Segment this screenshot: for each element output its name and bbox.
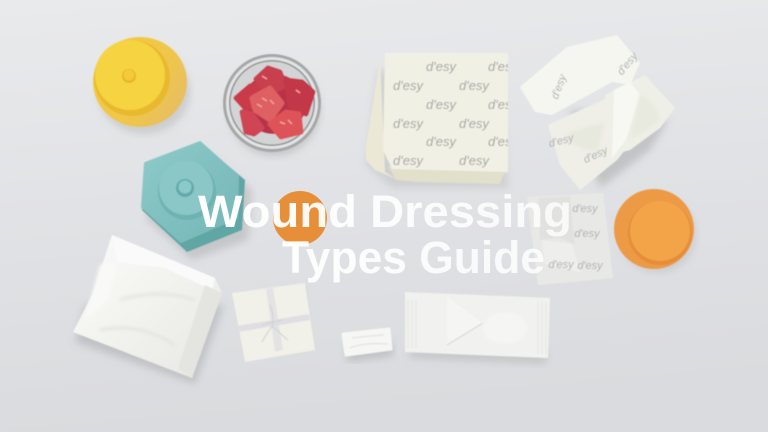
repeated brand print: d'esy <box>459 153 490 168</box>
panel: small folded gauze: d'esy <box>577 260 604 272</box>
icon: orange cap <box>614 189 696 273</box>
repeated brand print: d'esy <box>393 153 424 168</box>
repeated brand print: d'esy <box>426 97 457 112</box>
panel: tied gauze square <box>232 283 315 362</box>
panel: small folded gauze: d'esy <box>548 259 575 271</box>
panel: small folded gauze: d'esy <box>572 203 599 215</box>
repeated brand print: d'esy <box>393 78 424 93</box>
panel: crumpled printed cloth: d'esy <box>547 132 576 150</box>
icon: yellow pot <box>93 37 190 134</box>
panel: crumpled printed cloth: d'esy <box>615 49 641 78</box>
title: Wound Dressing <box>198 186 572 237</box>
panel: small folded gauze: d'esy <box>574 228 601 240</box>
repeated brand print: d'esy <box>459 116 490 131</box>
icon: rolled bandage <box>343 329 394 362</box>
repeated brand print: d'esy <box>426 134 457 149</box>
panel: crumpled printed cloth: d'esy <box>582 144 611 166</box>
icon: teal hexagonal container <box>142 142 252 260</box>
icon: glass jar of strawberries <box>223 54 321 156</box>
repeated brand print: d'esy <box>488 97 519 112</box>
panel: crumpled printed cloth: d'esy <box>549 72 570 101</box>
repeated brand print: d'esy <box>459 78 490 93</box>
repeated brand print: d'esy <box>393 116 424 131</box>
repeated brand print: d'esy <box>426 59 457 74</box>
panel: crumpled printed cloth <box>520 35 675 190</box>
panel: long non-woven dressing <box>405 292 550 364</box>
repeated brand print <box>393 61 508 168</box>
title: Types Guide <box>282 232 545 283</box>
panel: stack of printed gauze squares <box>366 53 519 188</box>
panel: small folded gauze <box>527 193 613 285</box>
panel: large absorbent pad <box>73 235 224 384</box>
title <box>198 186 572 283</box>
icon: orange disc <box>273 191 327 245</box>
repeated brand print: d'esy <box>488 134 519 149</box>
repeated brand print: d'esy <box>488 59 519 74</box>
